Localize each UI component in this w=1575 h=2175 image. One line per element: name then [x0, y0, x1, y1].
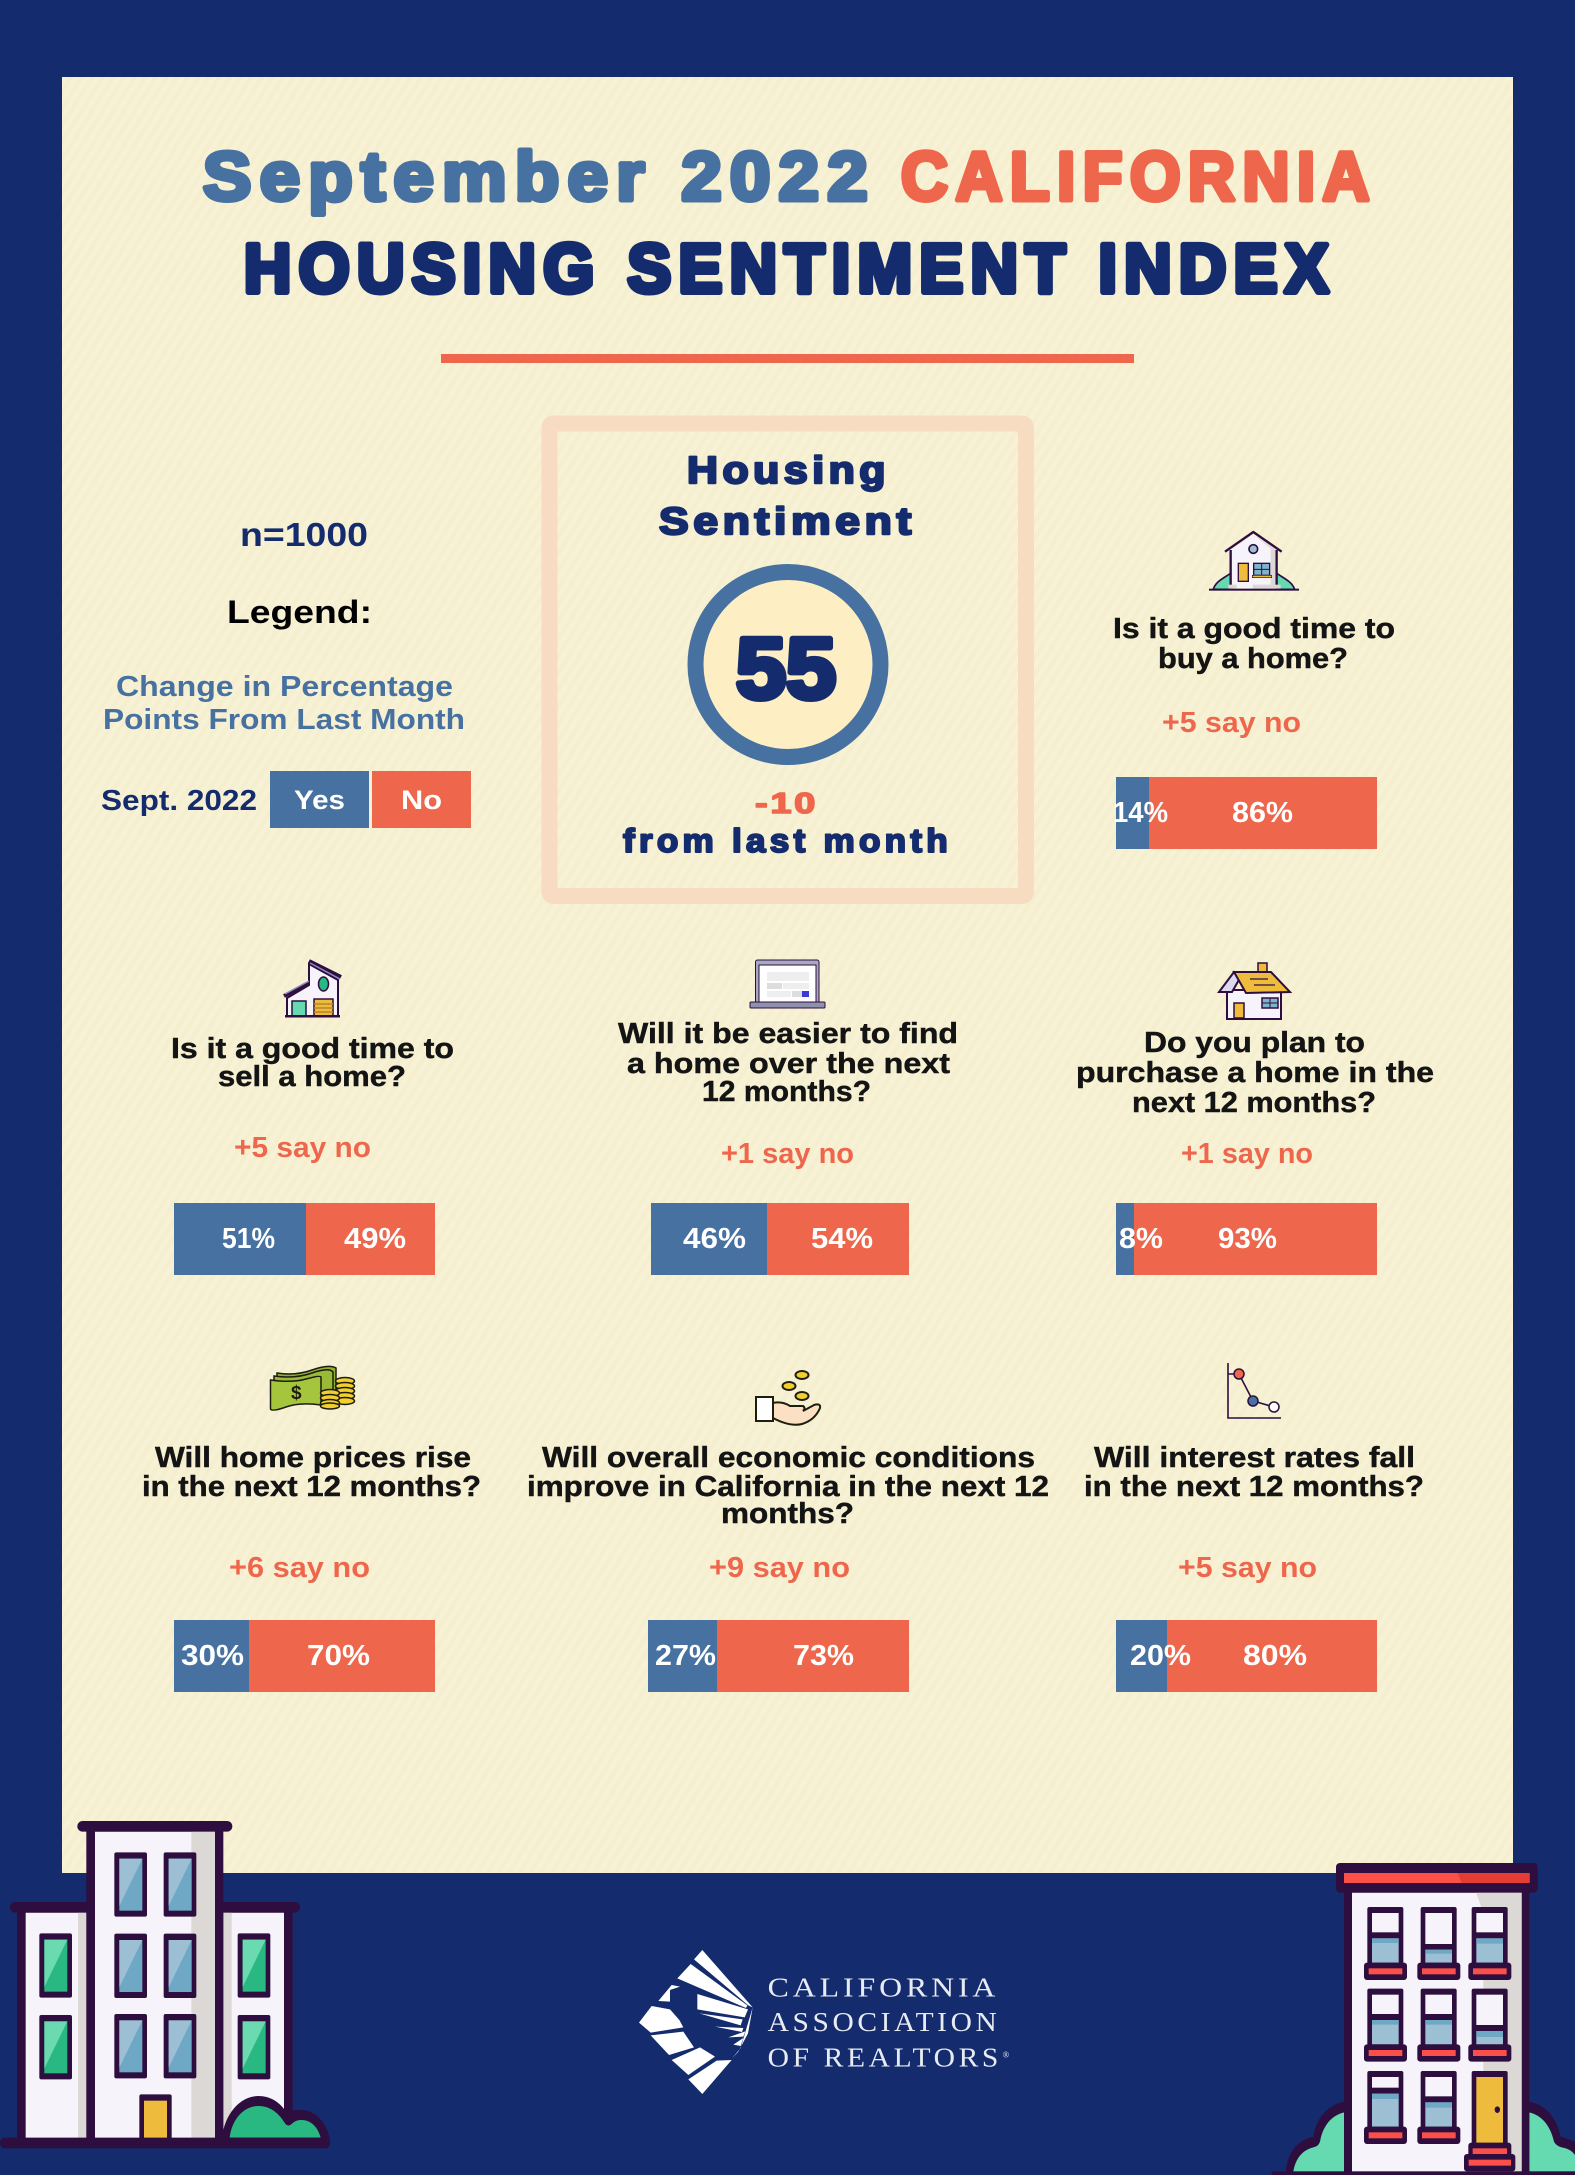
change label: +5 say no — [1178, 1552, 1317, 1584]
icon: house with bushes — [1209, 532, 1299, 591]
illustration: right townhouse — [1272, 1863, 1575, 2175]
legend panel — [101, 516, 471, 828]
panel: interest rates — [1084, 1363, 1424, 1692]
title: CALIFORNIA — [901, 138, 1377, 215]
icon: laptop — [750, 960, 825, 1008]
title — [203, 138, 1377, 307]
stacked bar: 30% — [181, 1640, 244, 1672]
legend description: Points From Last Month — [103, 704, 465, 736]
stacked bar — [174, 1620, 435, 1692]
question — [618, 1018, 958, 1108]
sample size: n=1000 — [240, 516, 368, 553]
stacked bar: 51% — [222, 1223, 275, 1255]
legend key: Yes — [294, 785, 345, 815]
change label: +1 say no — [721, 1138, 854, 1170]
stacked bar — [1116, 1203, 1377, 1275]
stacked bar: 70% — [307, 1640, 370, 1672]
icon: cash and coins — [270, 1366, 354, 1410]
logo wordmark: OF REALTORS — [768, 2043, 1002, 2073]
stacked bar: 93% — [1218, 1223, 1277, 1255]
change label: +5 say no — [234, 1132, 371, 1164]
stacked bar — [651, 1203, 909, 1275]
title: September 2022 — [203, 138, 876, 215]
question: in the next 12 months? — [1084, 1471, 1424, 1503]
panel: home prices — [142, 1366, 481, 1692]
question — [527, 1442, 1049, 1530]
stacked bar — [1113, 777, 1377, 849]
logo wordmark: ® — [1003, 2049, 1010, 2059]
stacked bar — [648, 1620, 909, 1692]
panel: sell a home — [171, 961, 454, 1275]
legend description: Change in Percentage — [116, 671, 453, 703]
card heading: Housing — [687, 450, 890, 492]
stacked bar: 14% — [1113, 797, 1168, 829]
legend description — [103, 671, 465, 736]
illustration: left apartment building — [0, 1821, 330, 2148]
stacked bar: 80% — [1243, 1640, 1307, 1672]
change label: +6 say no — [229, 1552, 370, 1584]
question — [1084, 1442, 1424, 1503]
question: 12 months? — [702, 1076, 871, 1108]
question: in the next 12 months? — [142, 1471, 481, 1503]
question: Is it a good time to — [171, 1033, 454, 1065]
icon: yellow roof house — [1219, 963, 1290, 1019]
question: Will interest rates fall — [1094, 1442, 1415, 1474]
stacked bar — [174, 1203, 435, 1275]
question — [1113, 613, 1395, 675]
title: HOUSING SENTIMENT INDEX — [244, 230, 1336, 307]
question: months? — [721, 1498, 854, 1530]
legend key: No — [401, 785, 442, 815]
question — [142, 1442, 481, 1503]
question: improve in California in the next 12 — [527, 1471, 1049, 1503]
legend key: Sept. 2022 — [101, 785, 257, 817]
card heading — [659, 450, 916, 543]
stacked bar: 20% — [1130, 1640, 1191, 1672]
question: Do you plan to — [1144, 1027, 1365, 1059]
stacked bar: 54% — [811, 1223, 873, 1255]
question — [1076, 1027, 1434, 1119]
panel: buy a home — [1113, 532, 1395, 849]
question — [171, 1033, 454, 1093]
panel: economic conditions — [527, 1371, 1049, 1692]
change label: +5 say no — [1162, 707, 1301, 739]
card heading: Sentiment — [659, 501, 916, 543]
cream background panel — [62, 77, 1513, 1873]
stacked bar: 86% — [1232, 797, 1293, 829]
logo wordmark — [768, 1973, 1010, 2073]
logo wordmark: CALIFORNIA — [768, 1973, 999, 2003]
title underline — [441, 354, 1134, 363]
legend key — [101, 771, 471, 828]
question: purchase a home in the — [1076, 1057, 1434, 1089]
question: buy a home? — [1158, 643, 1348, 675]
icon: two-storey house — [284, 961, 341, 1018]
stacked bar: 27% — [655, 1640, 716, 1672]
panel: plan to purchase — [1076, 963, 1434, 1275]
stacked bar: 8% — [1119, 1223, 1163, 1255]
icon: falling line chart — [1228, 1363, 1281, 1418]
panel: housing sentiment score — [550, 424, 1026, 896]
score number: 55 — [736, 621, 836, 717]
stacked bar: 49% — [344, 1223, 406, 1255]
logo: California Association of Realtors — [639, 1950, 1010, 2094]
question: Will it be easier to find — [618, 1018, 958, 1050]
stacked bar — [1116, 1620, 1377, 1692]
stacked bar: 46% — [683, 1223, 746, 1255]
question: Will overall economic conditions — [542, 1442, 1035, 1474]
change label: +9 say no — [709, 1552, 850, 1584]
icon: hand with coins — [756, 1371, 820, 1425]
question: Will home prices rise — [155, 1442, 471, 1474]
question: Is it a good time to — [1113, 613, 1395, 645]
icon: cash and coins: $ — [291, 1383, 302, 1404]
stacked bar: 73% — [793, 1640, 854, 1672]
change caption: from last month — [623, 822, 952, 859]
panel: easier to find a home — [618, 960, 958, 1275]
change label: +1 say no — [1181, 1138, 1313, 1170]
score change: -10 — [755, 788, 818, 820]
question: sell a home? — [218, 1061, 406, 1093]
score circle — [696, 572, 880, 757]
card frame — [550, 424, 1026, 896]
legend heading: Legend: — [227, 594, 372, 630]
question: next 12 months? — [1132, 1087, 1376, 1119]
logo mark — [639, 1950, 753, 2094]
logo wordmark: ASSOCIATION — [768, 2007, 1000, 2037]
question: a home over the next — [627, 1048, 951, 1080]
